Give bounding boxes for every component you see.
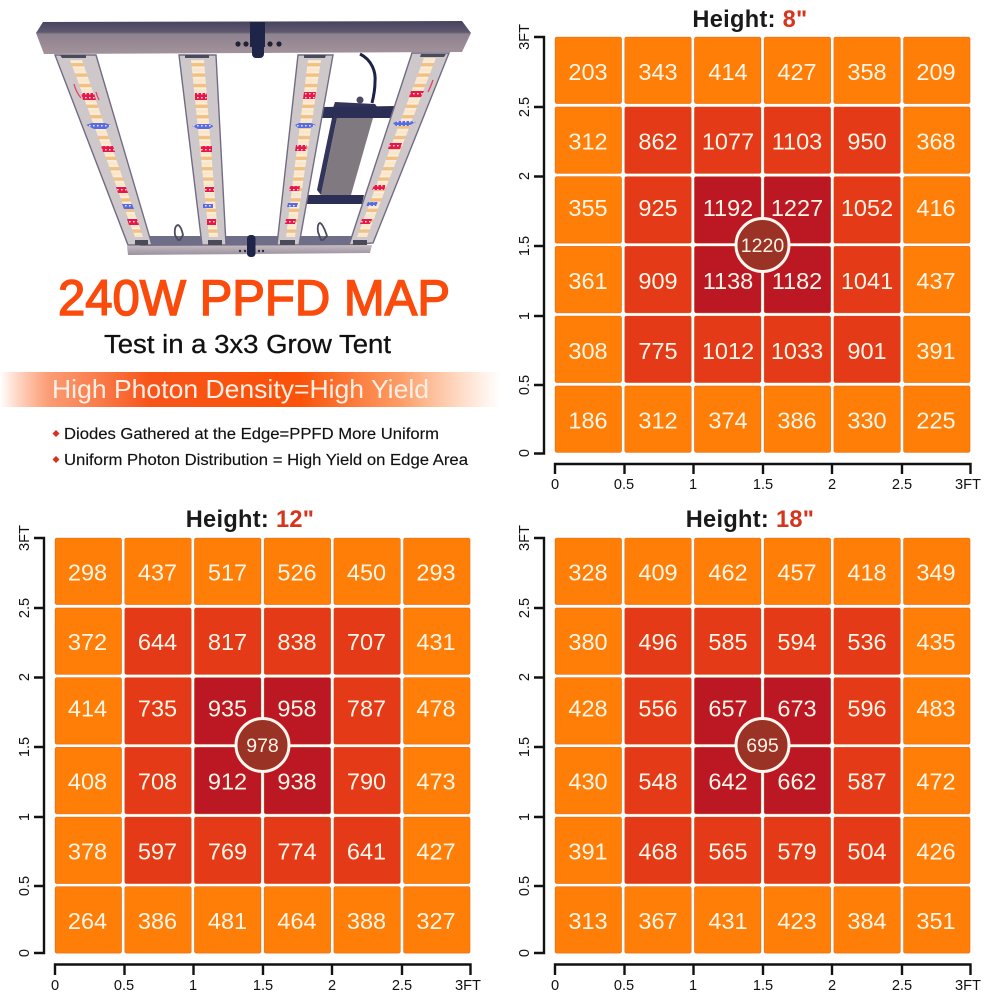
PPFD values: 1138	[703, 268, 753, 294]
PPFD values: 587	[847, 768, 887, 794]
axes: 0.5	[614, 477, 634, 493]
axes: 0	[551, 978, 559, 994]
PPFD values: 378	[68, 838, 107, 864]
PPFD values: 901	[847, 338, 887, 364]
axes: 2	[17, 673, 33, 681]
title: 240W PPFD MAP	[58, 270, 450, 326]
PPFD values: 838	[277, 629, 317, 655]
axes: 1.5	[753, 978, 773, 994]
PPFD values: 517	[208, 560, 247, 586]
PPFD values: 343	[638, 59, 678, 85]
PPFD values: 1192	[703, 195, 753, 221]
PPFD values: 642	[708, 768, 748, 794]
PPFD values: 565	[708, 838, 748, 864]
PPFD values: 328	[568, 560, 608, 586]
PPFD values: 330	[847, 408, 887, 434]
axes: 3FT	[17, 525, 33, 551]
PPFD values: 708	[138, 768, 177, 794]
PPFD values: 431	[708, 908, 748, 934]
PPFD values: 414	[708, 59, 748, 85]
axes: 2.5	[517, 97, 533, 117]
axes	[17, 525, 481, 994]
PPFD values: 355	[568, 195, 608, 221]
axes: 2.5	[892, 978, 912, 994]
PPFD values: 312	[638, 408, 678, 434]
axes: 0.5	[614, 978, 634, 994]
axes	[517, 525, 981, 994]
PPFD values: 958	[277, 696, 317, 722]
banner: high photon density	[0, 372, 500, 407]
PPFD values: 351	[916, 908, 956, 934]
PPFD values: 464	[277, 908, 317, 934]
axes: 1.5	[753, 477, 773, 493]
PPFD values: 790	[347, 768, 386, 794]
axes: 2	[828, 978, 836, 994]
PPFD values: 225	[916, 408, 956, 434]
PPFD values: 673	[777, 696, 817, 722]
PPFD values: 536	[847, 629, 887, 655]
banner: high photon density: High Photon Density=High Yield	[52, 374, 429, 404]
PPFD values: 426	[916, 838, 956, 864]
PPFD values: 478	[416, 696, 456, 722]
axes: 1	[517, 813, 533, 821]
hooks	[175, 223, 327, 240]
PPFD values: 481	[208, 908, 247, 934]
PPFD values: 938	[277, 768, 317, 794]
front bottom bar	[127, 235, 372, 257]
PPFD values: 361	[568, 268, 608, 294]
PPFD values	[568, 59, 956, 434]
axes: 2.5	[517, 598, 533, 618]
PPFD values: 428	[568, 696, 608, 722]
bullet 2: Uniform Photon Distribution = High Yield on Edge Area	[64, 452, 468, 469]
axes: 1	[517, 312, 533, 320]
PPFD values: 186	[568, 408, 608, 434]
PPFD values: 1052	[841, 195, 893, 221]
PPFD values: 313	[568, 908, 608, 934]
PPFD values: 1103	[772, 128, 822, 154]
PPFD values: 327	[416, 908, 456, 934]
PPFD values: 368	[916, 128, 956, 154]
axes: 1.5	[253, 978, 273, 994]
PPFD values: 298	[68, 560, 107, 586]
PPFD values: 372	[68, 629, 107, 655]
center reading: 1220	[741, 235, 784, 257]
PPFD values: 308	[568, 338, 608, 364]
axes: 0.5	[517, 375, 533, 395]
axes: 0.5	[517, 876, 533, 896]
axes: 2	[828, 477, 836, 493]
axes: 1.5	[517, 737, 533, 757]
PPFD values: 483	[916, 696, 956, 722]
axes: 0	[51, 978, 59, 994]
axes: 2	[517, 172, 533, 180]
PPFD values: 358	[847, 59, 887, 85]
PPFD values: 935	[208, 696, 247, 722]
PPFD values: 468	[638, 838, 678, 864]
PPFD values: 787	[347, 696, 386, 722]
axes: 0	[17, 949, 33, 957]
PPFD values: 388	[347, 908, 386, 934]
PPFD values: 386	[777, 408, 817, 434]
PPFD values: 594	[777, 629, 817, 655]
axes: 2.5	[17, 598, 33, 618]
PPFD values: 1012	[702, 338, 754, 364]
heat map cells	[555, 37, 970, 452]
PPFD values: 384	[847, 908, 887, 934]
PPFD values: 1041	[841, 268, 893, 294]
PPFD values: 457	[777, 560, 817, 586]
PPFD values: 349	[916, 560, 956, 586]
center reading	[736, 218, 789, 272]
axes: 0	[517, 449, 533, 457]
PPFD values: 473	[416, 768, 456, 794]
PPFD values: 657	[708, 696, 748, 722]
heat map cells	[55, 538, 470, 953]
center reading	[236, 718, 289, 772]
axes: 0.5	[17, 876, 33, 896]
PPFD values	[568, 560, 956, 934]
PPFD values: 504	[847, 838, 887, 864]
axes: 2.5	[392, 978, 412, 994]
axes: 1	[189, 978, 197, 994]
PPFD values: 367	[638, 908, 678, 934]
PPFD values: 641	[347, 838, 386, 864]
PPFD values: 644	[138, 629, 177, 655]
product photo: LED grow light	[36, 21, 471, 257]
light bar 4	[349, 53, 449, 245]
PPFD values: 735	[138, 696, 177, 722]
PPFD values: 909	[638, 268, 678, 294]
PPFD values: 472	[916, 768, 956, 794]
PPFD values: 414	[68, 696, 107, 722]
panel: height 18 inch map	[517, 507, 981, 994]
PPFD values: 391	[916, 338, 956, 364]
PPFD values: 526	[277, 560, 317, 586]
PPFD values: 950	[847, 128, 887, 154]
light bar 1	[55, 55, 152, 245]
heading: Height: 12"	[186, 507, 314, 533]
center reading: 695	[746, 735, 779, 757]
PPFD values: 430	[568, 768, 608, 794]
PPFD values: 1227	[771, 195, 823, 221]
PPFD values: 496	[638, 629, 678, 655]
bullet list	[52, 426, 468, 469]
PPFD values: 585	[708, 629, 748, 655]
PPFD values: 556	[638, 696, 678, 722]
axes: 1	[689, 477, 697, 493]
PPFD values: 416	[916, 195, 956, 221]
PPFD values: 1182	[772, 268, 822, 294]
PPFD values: 817	[208, 629, 247, 655]
axes: 1	[17, 813, 33, 821]
axes: 3FT	[955, 477, 981, 493]
PPFD values: 431	[416, 629, 456, 655]
light bar 3	[277, 55, 333, 245]
PPFD values: 912	[208, 768, 247, 794]
driver box with brackets and cable	[305, 54, 396, 204]
subtitle: Test in a 3x3 Grow Tent	[104, 331, 391, 359]
PPFD values: 579	[777, 838, 817, 864]
PPFD values: 775	[638, 338, 678, 364]
PPFD values: 380	[568, 629, 608, 655]
PPFD values: 769	[208, 838, 247, 864]
center reading: 978	[246, 735, 279, 757]
bullet 1: Diodes Gathered at the Edge=PPFD More Uniform	[64, 426, 439, 443]
center reading	[736, 718, 789, 772]
axes: 2	[517, 673, 533, 681]
PPFD values: 391	[568, 838, 608, 864]
PPFD values: 437	[916, 268, 956, 294]
PPFD values: 209	[916, 59, 956, 85]
PPFD values: 1033	[771, 338, 823, 364]
PPFD values: 548	[638, 768, 678, 794]
PPFD values: 596	[847, 696, 887, 722]
PPFD values: 386	[138, 908, 177, 934]
PPFD values: 264	[68, 908, 107, 934]
PPFD values: 597	[138, 838, 177, 864]
light bar 2	[179, 55, 226, 245]
axes: 0	[517, 949, 533, 957]
axes: 1.5	[17, 737, 33, 757]
PPFD values: 707	[347, 629, 386, 655]
PPFD values: 1077	[702, 128, 754, 154]
PPFD values: 925	[638, 195, 678, 221]
PPFD values: 862	[638, 128, 678, 154]
axes: 2.5	[892, 477, 912, 493]
PPFD values: 203	[568, 59, 608, 85]
front top bar	[36, 21, 471, 58]
panel: height 8 inch map	[517, 7, 981, 493]
PPFD values: 437	[138, 560, 177, 586]
PPFD values: 418	[847, 560, 887, 586]
axes: 3FT	[517, 24, 533, 50]
axes: 1.5	[517, 236, 533, 256]
PPFD values: 774	[277, 838, 317, 864]
axes: 0.5	[114, 978, 134, 994]
PPFD values: 427	[777, 59, 817, 85]
PPFD values: 374	[708, 408, 748, 434]
axes: 2	[328, 978, 336, 994]
PPFD values: 312	[568, 128, 608, 154]
axes: 3FT	[517, 525, 533, 551]
rear mounting bar	[140, 236, 360, 246]
PPFD values: 409	[638, 560, 678, 586]
axes: 3FT	[955, 978, 981, 994]
heading: Height: 18"	[686, 507, 814, 533]
panel: height 12 inch map	[17, 507, 481, 994]
heat map cells	[555, 538, 970, 953]
PPFD values: 662	[777, 768, 817, 794]
PPFD values	[68, 560, 456, 934]
axes	[517, 24, 981, 493]
PPFD values: 462	[708, 560, 748, 586]
heading: Height: 8"	[692, 7, 808, 33]
axes: 1	[689, 978, 697, 994]
PPFD values: 435	[916, 629, 956, 655]
PPFD values: 450	[347, 560, 386, 586]
axes: 3FT	[455, 978, 481, 994]
axes: 0	[551, 477, 559, 493]
PPFD values: 293	[416, 560, 456, 586]
PPFD values: 423	[777, 908, 817, 934]
PPFD values: 427	[416, 838, 456, 864]
PPFD values: 408	[68, 768, 107, 794]
